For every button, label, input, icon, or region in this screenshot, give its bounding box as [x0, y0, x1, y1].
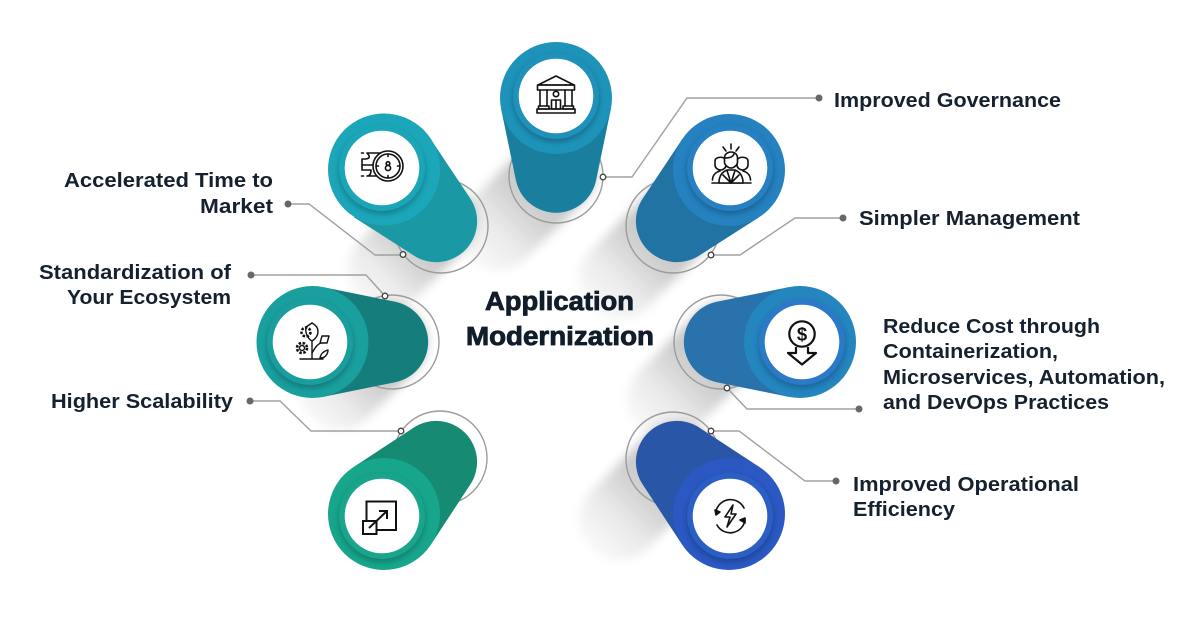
title: Application — [485, 288, 634, 316]
label: Standardization of Your Ecosystem: Your Ecosystem — [67, 286, 231, 309]
icon: team of people — [712, 144, 751, 183]
cylinder: operational efficiency — [636, 421, 785, 570]
label: Improved Operational Efficiency: Efficiency — [853, 498, 956, 521]
cylinder: scalability — [328, 421, 477, 570]
cylinder: standardization — [256, 286, 428, 398]
label: Reduce Cost — [724, 315, 1165, 414]
title: Modernization — [466, 323, 654, 351]
icon: scale up squares — [363, 502, 396, 534]
label: Simpler Management — [708, 207, 1080, 258]
label: Standardization of Your Ecosystem: Standardization of — [39, 261, 231, 284]
label: Higher Scalability: Higher Scalability — [51, 390, 234, 413]
label: Accelerated Time to Market — [64, 169, 406, 257]
label: Simpler Management: Simpler Management — [859, 207, 1080, 230]
label: Improved Operational Efficiency — [708, 428, 1079, 521]
icon: dollar with down arrow: $ — [797, 324, 808, 344]
cylinder: reduce cost — [684, 286, 856, 398]
label: Reduce Cost: Reduce Cost through — [883, 315, 1100, 338]
icon: speedometer — [362, 151, 403, 181]
icon: dollar with down arrow — [788, 321, 816, 364]
label: Improved Governance — [600, 89, 1061, 180]
label: Reduce Cost: and DevOps Practices — [883, 391, 1109, 414]
icon: bank building — [537, 76, 575, 113]
outline rings behind cylinders — [345, 129, 768, 506]
cylinder: management — [636, 114, 785, 262]
label: Accelerated Time to Market: Market — [200, 195, 273, 218]
label: Standardization of Your Ecosystem — [39, 261, 388, 309]
icon: lightning with cycle arrows — [715, 500, 745, 533]
label: Accelerated Time to Market: Accelerated Time to — [64, 169, 273, 192]
cylinder: time to market — [328, 114, 477, 262]
cylinder: governance — [500, 42, 612, 213]
label: Reduce Cost: Containerization, — [883, 340, 1058, 363]
label: Reduce Cost: Microservices, Automation, — [883, 366, 1165, 389]
title — [466, 288, 654, 351]
label: Improved Operational Efficiency: Improved Operational — [853, 473, 1079, 496]
icon: plant with gears — [297, 323, 329, 359]
label: Higher Scalability — [51, 390, 404, 434]
cast shadows behind cylinders — [339, 172, 725, 520]
label: Improved Governance: Improved Governance — [834, 89, 1061, 112]
